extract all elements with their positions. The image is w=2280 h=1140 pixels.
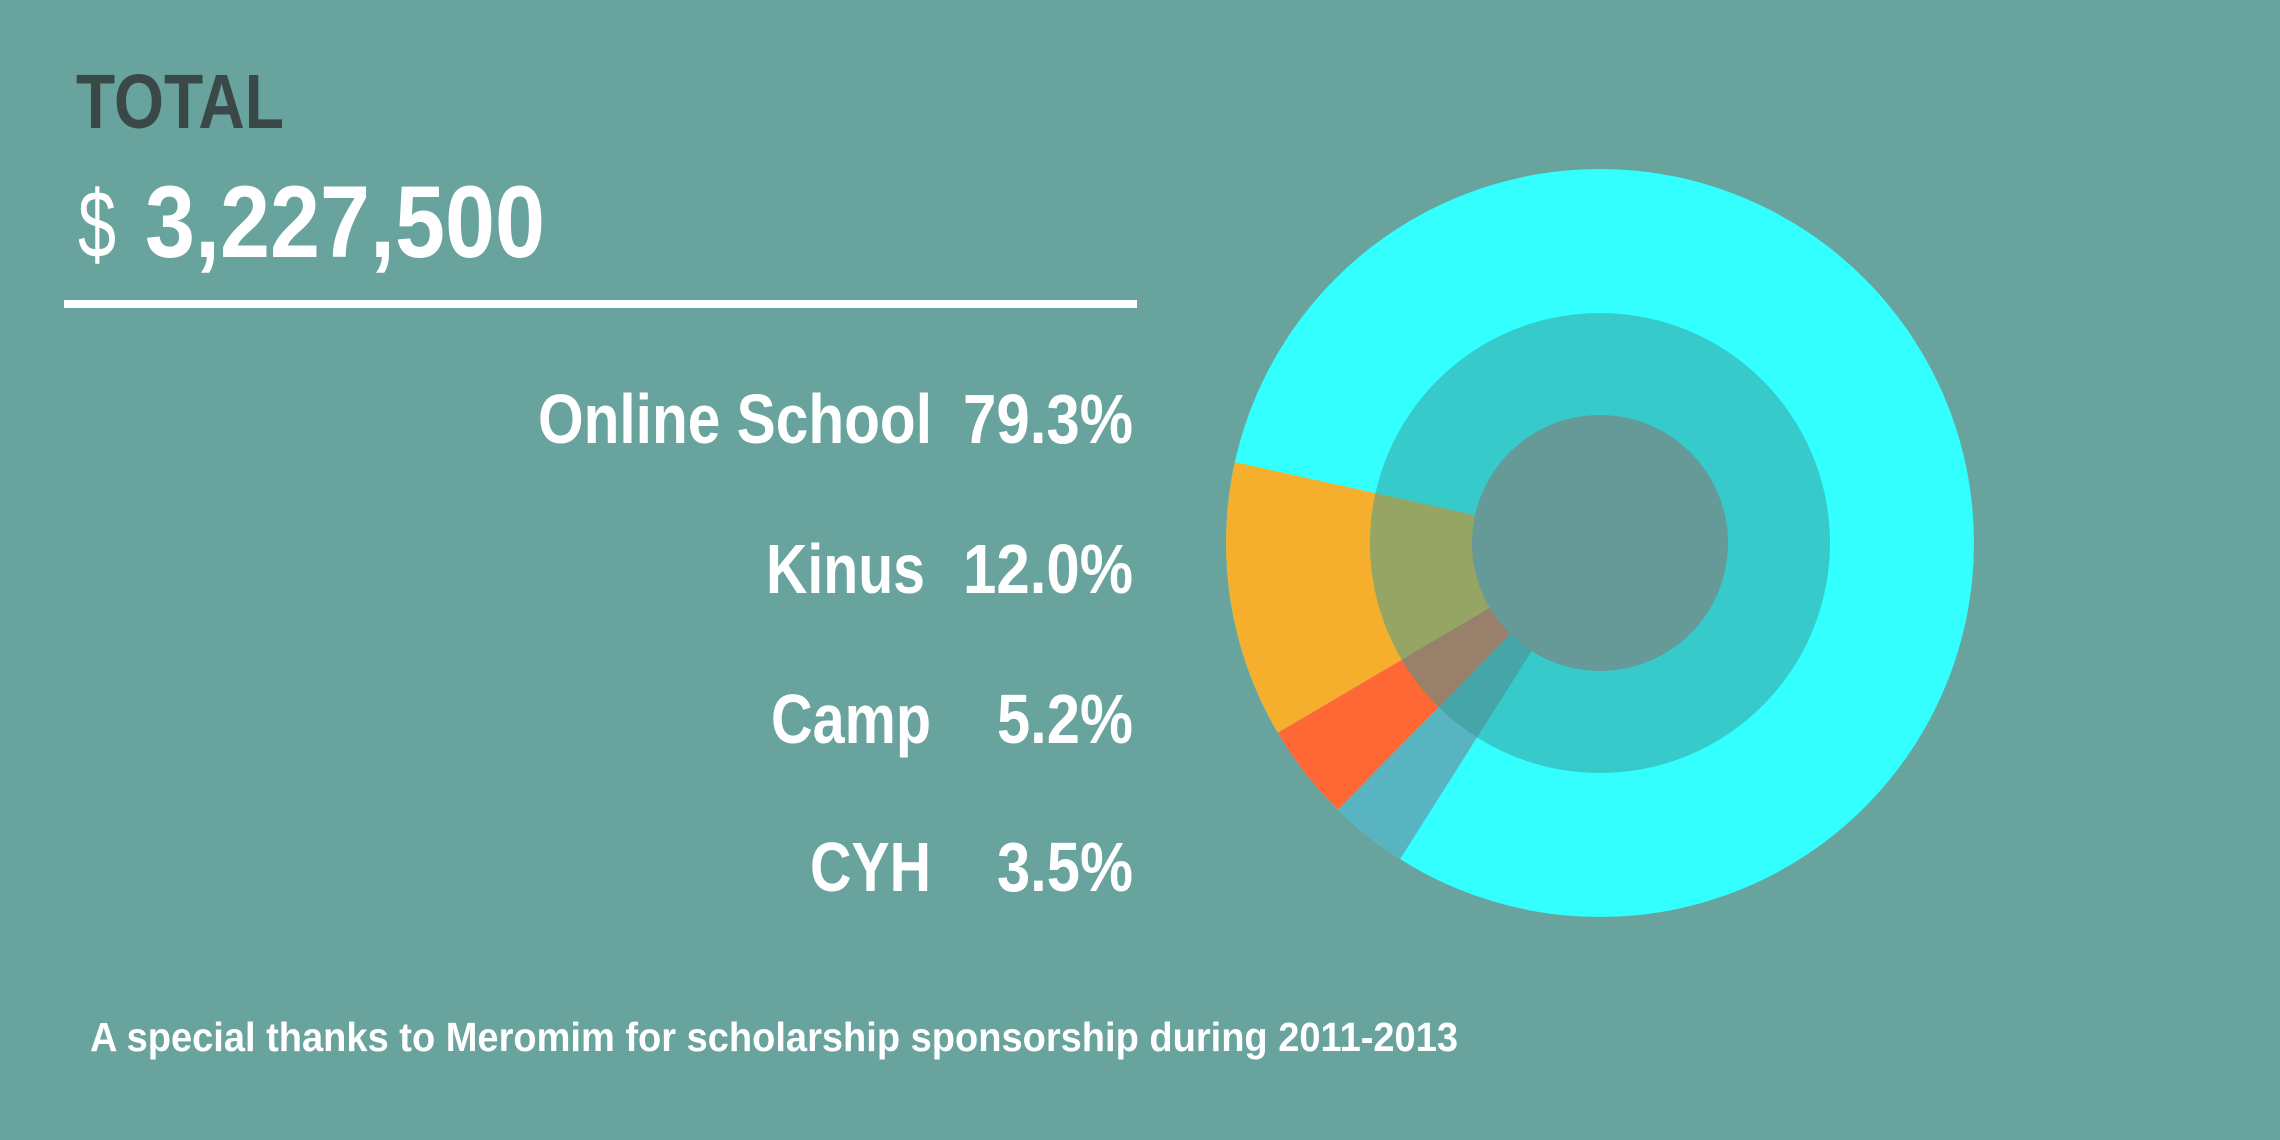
donut chart	[1226, 169, 1974, 917]
legend: Online School: 79.3%	[963, 380, 1133, 458]
legend: CYH	[810, 828, 1133, 906]
legend: Camp	[771, 680, 1133, 758]
legend: CYH: 3.5%	[997, 828, 1133, 906]
legend: Kinus: Kinus	[766, 530, 925, 608]
legend: Camp: 5.2%	[997, 680, 1133, 758]
legend: Kinus	[766, 530, 1133, 608]
total amount: $	[78, 171, 116, 278]
legend: Kinus: 12.0%	[963, 530, 1133, 608]
legend: CYH: CYH	[810, 828, 931, 906]
legend: Camp: Camp	[771, 680, 931, 758]
legend: Online School: Online School	[538, 380, 932, 458]
total amount: 3,227,500	[145, 165, 545, 279]
title: TOTAL: TOTAL	[76, 59, 284, 145]
footer note: A special thanks to Meromim for scholarship sponsorship during 2011-2013	[90, 1014, 1458, 1060]
